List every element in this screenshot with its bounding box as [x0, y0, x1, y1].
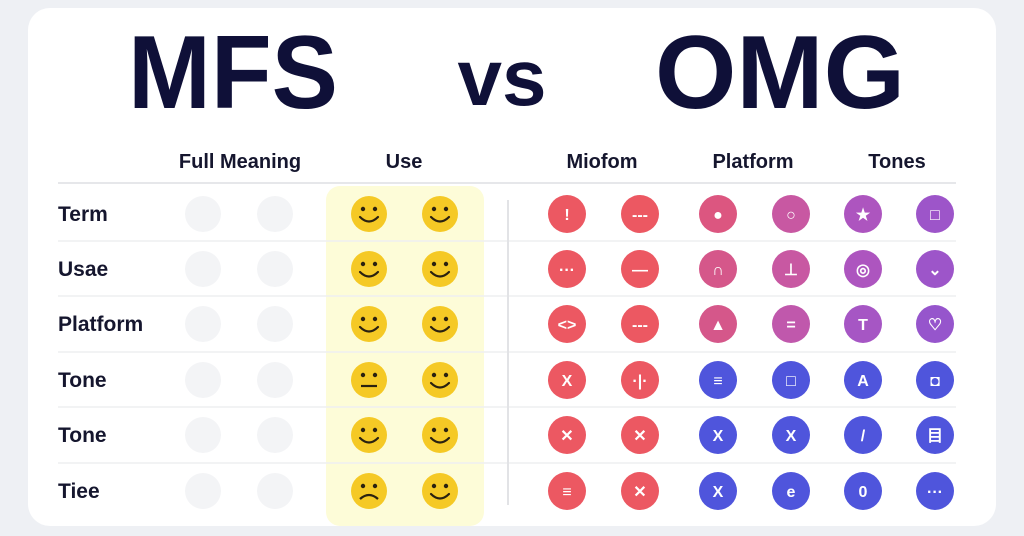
colored icons grid [548, 195, 954, 510]
title: vs [458, 33, 546, 122]
colored icons grid: ♡ [928, 317, 942, 334]
title [128, 15, 905, 131]
title: MFS [128, 15, 338, 131]
column headers: Platform [712, 151, 794, 173]
row labels: Tone [58, 369, 107, 392]
column headers: Use [386, 151, 422, 173]
column headers: Full Meaning [179, 151, 301, 173]
colored icons grid: ≡ [562, 484, 572, 501]
colored icons grid: e [787, 484, 796, 501]
colored icons grid: ◘ [930, 373, 940, 390]
colored icons grid: ○ [786, 207, 796, 224]
row labels: Tiee [58, 480, 100, 503]
colored icons grid: ◎ [856, 262, 870, 279]
colored icons grid: ! [564, 207, 570, 224]
colored icons grid: 0 [859, 484, 868, 501]
faded full meaning icons [185, 196, 293, 509]
column headers: Tones [868, 151, 926, 173]
colored icons grid: X [713, 428, 724, 445]
colored icons grid: □ [930, 207, 940, 224]
highlight column [326, 186, 484, 526]
colored icons grid: T [858, 317, 868, 334]
colored icons grid: X [713, 484, 724, 501]
row labels: Platform [58, 313, 143, 336]
colored icons grid: ✕ [560, 428, 574, 445]
colored icons grid: ≡ [713, 373, 723, 390]
colored icons grid: X [562, 373, 573, 390]
colored icons grid: □ [786, 373, 796, 390]
colored icons grid: ✕ [633, 428, 647, 445]
title: OMG [655, 15, 905, 131]
colored icons grid: <> [558, 317, 576, 334]
colored icons grid: = [786, 317, 796, 334]
colored icons grid: A [857, 373, 869, 390]
colored icons grid: ✕ [633, 484, 647, 501]
column headers: Miofom [566, 151, 638, 173]
colored icons grid: ∩ [712, 262, 724, 279]
row labels: Term [58, 203, 108, 226]
row labels: Tone [58, 424, 107, 447]
colored icons grid: --- [632, 207, 648, 224]
colored icons grid: 目 [927, 427, 943, 445]
column headers [179, 151, 926, 173]
colored icons grid: --- [632, 317, 648, 334]
colored icons grid: ·|· [632, 373, 648, 390]
row labels: Usae [58, 258, 108, 281]
colored icons grid: — [632, 262, 648, 279]
colored icons grid: ● [713, 207, 723, 224]
colored icons grid: ★ [856, 207, 871, 224]
colored icons grid: ⊥ [784, 262, 798, 279]
colored icons grid: ▲ [710, 317, 726, 334]
colored icons grid: ⌄ [928, 262, 942, 279]
colored icons grid: X [786, 428, 797, 445]
colored icons grid: ··· [927, 484, 943, 501]
colored icons grid: / [861, 428, 866, 445]
colored icons grid: ··· [559, 262, 575, 279]
smiley icons [351, 196, 458, 509]
row labels [58, 203, 143, 503]
